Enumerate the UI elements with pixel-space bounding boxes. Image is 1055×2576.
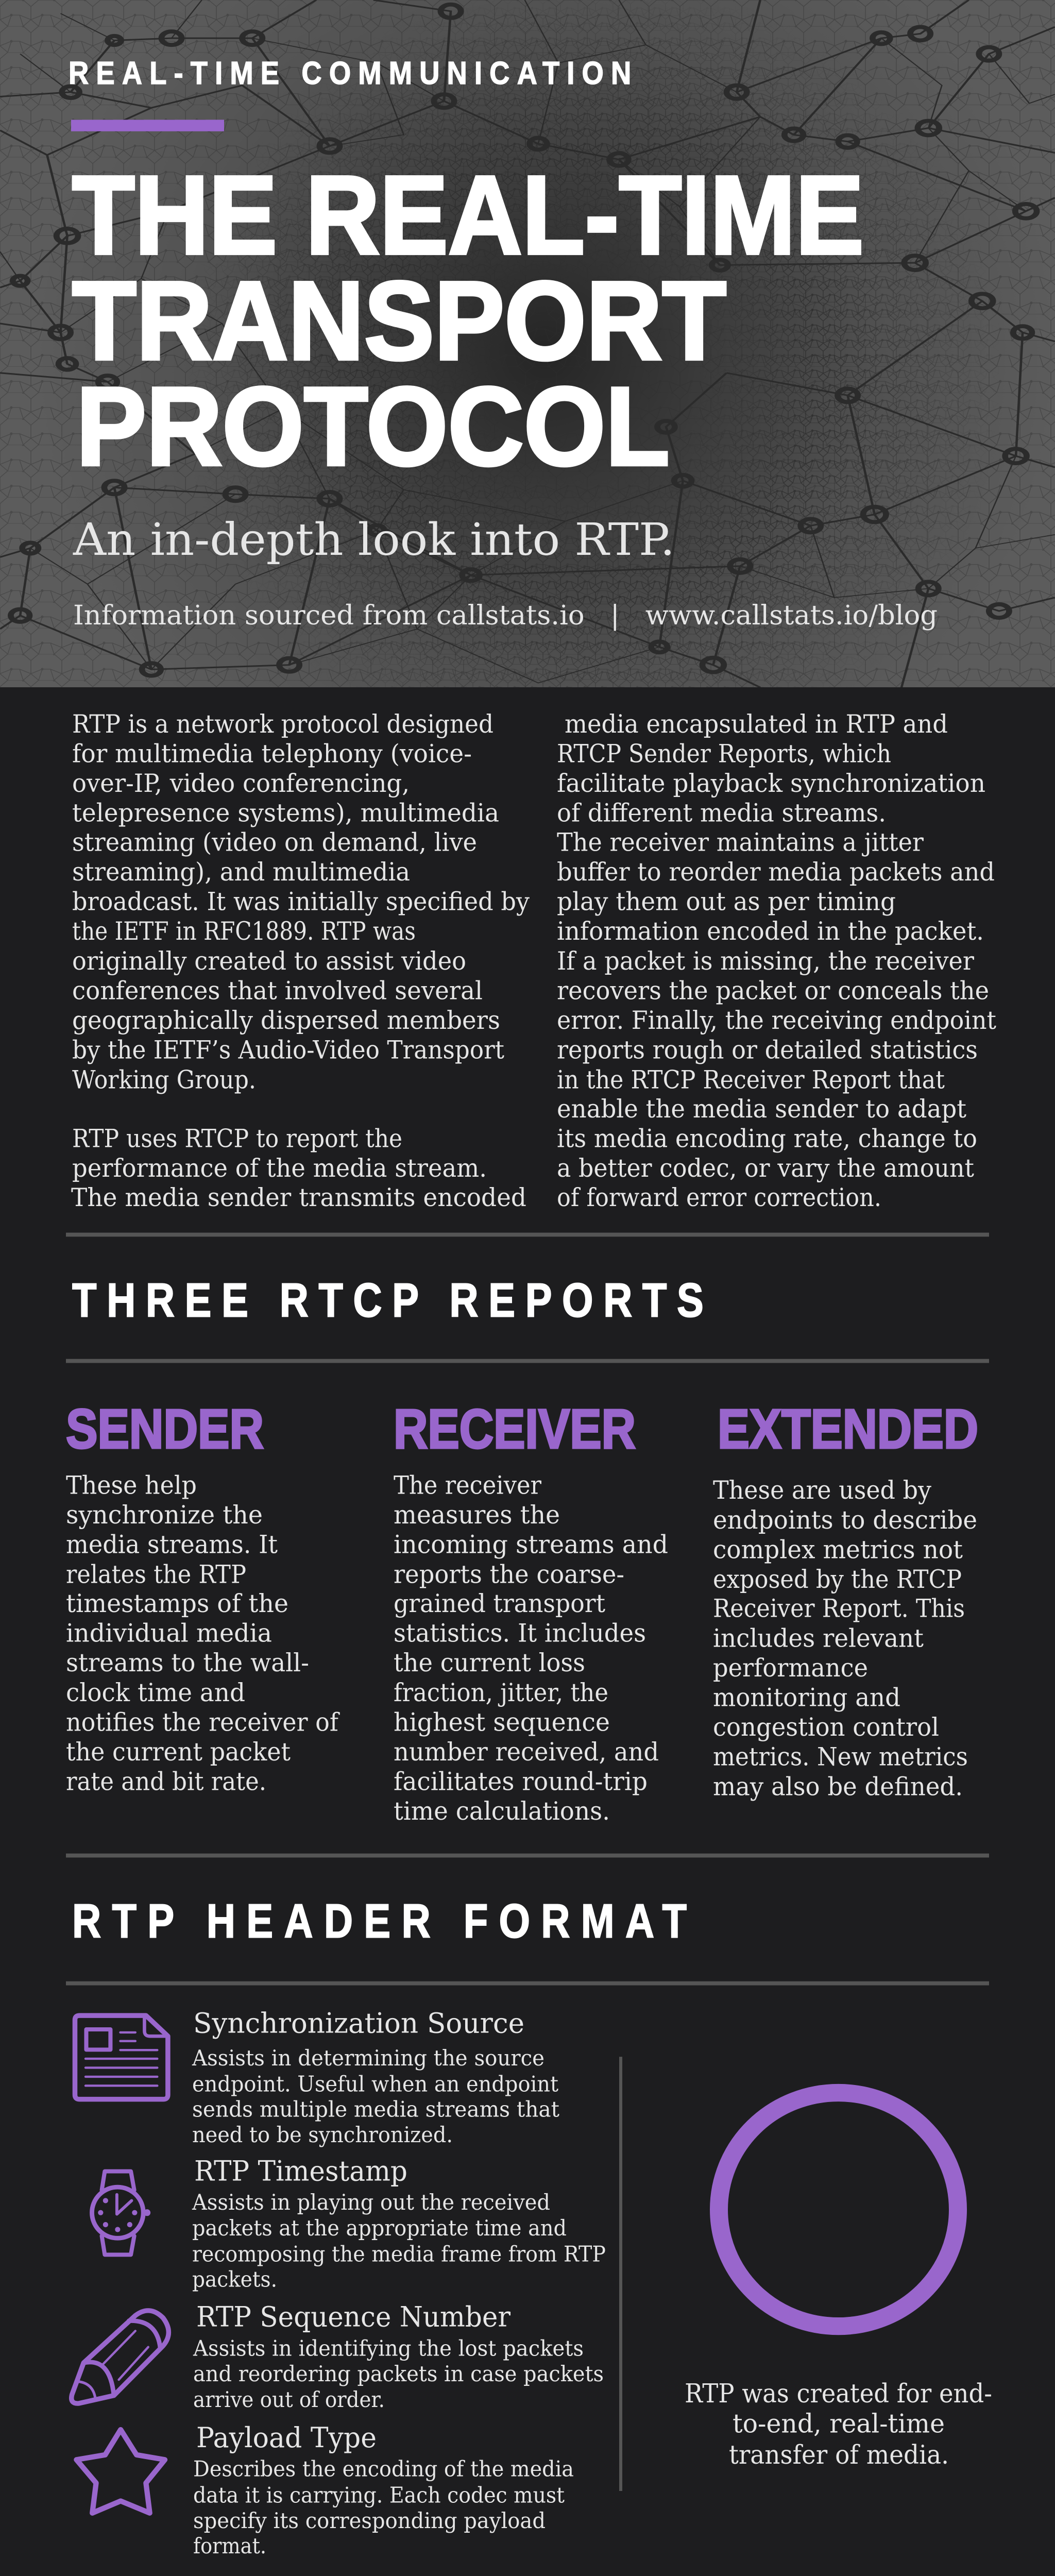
- sender body text: notifies the receiver of: [66, 1707, 340, 1737]
- description: RTP sequence number: and reordering packets in case packets: [193, 2362, 604, 2387]
- intro text: left column: broadcast. It was initially specified by: [72, 887, 530, 916]
- main title: TRANSPORT: [72, 259, 726, 383]
- intro text: left column: the IETF in RFC1889. RTP was: [72, 917, 416, 946]
- callout text: to-end, real-time: [733, 2409, 945, 2439]
- intro text: left column: streaming (video on demand, live: [72, 827, 477, 857]
- description: RTP timestamp: [192, 2191, 606, 2292]
- eyebrow label: REAL-TIME COMMUNICATION: [69, 56, 631, 91]
- description: synchronization source: [192, 2046, 559, 2148]
- intro text: right column: a better codec, or vary the amount: [557, 1154, 974, 1183]
- intro text: right column: error. Finally, the receiving endpoint: [557, 1006, 996, 1035]
- intro text: right column: play them out as per timing: [557, 887, 896, 916]
- title: payload type: Payload Type: [196, 2422, 377, 2454]
- icon: newspaper: [75, 2015, 168, 2099]
- panel: receiver report: [394, 1399, 668, 1826]
- sender body text: media streams. It: [66, 1530, 278, 1560]
- description: RTP timestamp: packets.: [192, 2267, 277, 2292]
- section heading: RTP header format: RTP HEADER FORMAT: [72, 1894, 687, 1948]
- extended body text: monitoring and: [713, 1683, 900, 1712]
- title: synchronization source: Synchronization Source: [193, 2007, 524, 2040]
- description: RTP timestamp: Assists in playing out the received: [192, 2191, 550, 2215]
- intro text: left column: by the IETF’s Audio-Video Transport: [72, 1035, 504, 1065]
- intro text: left column: telepresence systems), multimedia: [72, 798, 499, 828]
- receiver body text: time calculations.: [394, 1797, 610, 1826]
- receiver body text: reports the coarse-: [394, 1560, 624, 1589]
- header panel: [0, 0, 1055, 687]
- intro text: left column: [71, 709, 530, 1212]
- sender body text: individual media: [66, 1618, 272, 1648]
- panel: sender report: [66, 1399, 340, 1796]
- main title: [72, 175, 861, 468]
- main title: PROTOCOL: [76, 364, 670, 489]
- callout text: [685, 2379, 992, 2470]
- intro text: left column: over-IP, video conferencing,: [72, 769, 410, 798]
- description: RTP sequence number: [193, 2336, 604, 2413]
- sender body text: These help: [66, 1470, 197, 1500]
- receiver body text: incoming streams and: [394, 1530, 668, 1560]
- receiver body text: The receiver: [394, 1470, 541, 1500]
- description: synchronization source: endpoint. Useful when an endpoint: [192, 2072, 558, 2097]
- intro text: right column: its media encoding rate, change to: [557, 1124, 977, 1153]
- sender body text: the current packet: [66, 1737, 291, 1767]
- sender body text: timestamps of the: [66, 1588, 288, 1618]
- intro text: right column: in the RTCP Receiver Report that: [557, 1065, 945, 1094]
- icon: wristwatch: [92, 2172, 150, 2255]
- sender body text: synchronize the: [66, 1500, 263, 1530]
- description: payload type: Describes the encoding of the media: [193, 2457, 574, 2482]
- item: RTP sequence number: [193, 2301, 604, 2413]
- sender body text: rate and bit rate.: [66, 1767, 266, 1796]
- description: RTP timestamp: packets at the appropriate time and: [192, 2216, 567, 2241]
- intro text: right column: of different media streams.: [557, 798, 886, 828]
- receiver body text: statistics. It includes: [394, 1618, 646, 1648]
- sender body text: [66, 1470, 340, 1796]
- receiver body text: highest sequence: [394, 1707, 610, 1737]
- header network background image: [0, 0, 1055, 687]
- description: synchronization source: need to be synchronized.: [192, 2123, 453, 2148]
- intro text: right column: RTCP Sender Reports, which: [557, 739, 891, 768]
- intro text: right column: of forward error correction.: [557, 1182, 881, 1212]
- callout text: RTP was created for end-: [685, 2379, 992, 2409]
- intro text: right column: If a packet is missing, the receiver: [557, 946, 974, 976]
- extended body text: congestion control: [713, 1713, 939, 1742]
- sender body text: relates the RTP: [66, 1560, 246, 1589]
- intro text: right column: [557, 709, 996, 1212]
- extended body text: Receiver Report. This: [713, 1594, 965, 1623]
- callout text: transfer of media.: [729, 2440, 949, 2470]
- description: RTP timestamp: recomposing the media frame from RTP: [192, 2242, 606, 2267]
- heading: sender: SENDER: [66, 1399, 264, 1460]
- receiver body text: measures the: [394, 1500, 560, 1530]
- intro text: left column: geographically dispersed members: [72, 1006, 500, 1035]
- intro text: left column: The media sender transmits encoded: [71, 1182, 526, 1212]
- extended body text: may also be defined.: [713, 1772, 963, 1801]
- heading: receiver: RECEIVER: [394, 1399, 636, 1460]
- intro text: right column: media encapsulated in RTP and: [565, 709, 948, 739]
- intro text: right column: recovers the packet or conceals the: [557, 976, 989, 1005]
- subtitle: An in-depth look into RTP.: [73, 514, 675, 566]
- receiver body text: number received, and: [394, 1737, 659, 1767]
- intro text: left column: originally created to assist video: [72, 946, 466, 976]
- item: RTP timestamp: [192, 2155, 606, 2292]
- description: payload type: specify its corresponding payload: [193, 2509, 546, 2534]
- description: payload type: format.: [193, 2534, 266, 2559]
- intro text: left column: performance of the media stream.: [72, 1154, 487, 1183]
- intro text: right column: enable the media sender to adapt: [557, 1094, 966, 1124]
- title: RTP sequence number: RTP Sequence Number: [196, 2301, 511, 2333]
- description: payload type: data it is carrying. Each codec must: [193, 2483, 565, 2508]
- description: RTP sequence number: Assists in identifying the lost packets: [193, 2336, 584, 2361]
- intro text: left column: Working Group.: [72, 1065, 256, 1094]
- sender body text: clock time and: [66, 1677, 245, 1707]
- description: payload type: [193, 2457, 574, 2559]
- intro text: right column: reports rough or detailed statistics: [557, 1035, 978, 1065]
- item: payload type: [193, 2422, 574, 2559]
- receiver body text: [394, 1470, 668, 1826]
- description: RTP sequence number: arrive out of order.: [193, 2387, 385, 2413]
- ring graphic: [719, 2093, 958, 2326]
- extended body text: [713, 1476, 977, 1801]
- intro text: left column: RTP uses RTCP to report the: [72, 1124, 402, 1153]
- accent bar: [71, 120, 224, 131]
- extended body text: metrics. New metrics: [713, 1742, 968, 1772]
- title: RTP timestamp: RTP Timestamp: [194, 2155, 407, 2188]
- intro text: left column: conferences that involved several: [72, 976, 483, 1005]
- sender body text: streams to the wall-: [66, 1648, 309, 1677]
- intro text: right column: The receiver maintains a jitter: [557, 827, 924, 857]
- heading: extended: EXTENDED: [718, 1399, 978, 1460]
- intro text: left column: streaming), and multimedia: [72, 857, 410, 887]
- receiver body text: the current loss: [394, 1648, 585, 1677]
- panel: extended report: [713, 1399, 978, 1801]
- intro text: right column: buffer to reorder media packets and: [557, 857, 995, 887]
- extended body text: These are used by: [713, 1476, 931, 1505]
- receiver body text: facilitates round-trip: [394, 1767, 648, 1796]
- extended body text: performance: [713, 1653, 868, 1683]
- icon: star: [76, 2430, 165, 2513]
- intro text: right column: information encoded in the packet.: [557, 917, 984, 946]
- section heading: three RTCP reports: THREE RTCP REPORTS: [72, 1274, 704, 1327]
- extended body text: includes relevant: [713, 1623, 924, 1653]
- extended body text: endpoints to describe: [713, 1505, 977, 1535]
- description: synchronization source: Assists in determining the source: [192, 2046, 544, 2071]
- intro text: right column: facilitate playback synchronization: [557, 769, 985, 798]
- main title: THE REAL-TIME: [72, 153, 864, 278]
- intro text: left column: RTP is a network protocol designed: [72, 709, 494, 739]
- receiver body text: fraction, jitter, the: [394, 1677, 608, 1707]
- source line: Information sourced from callstats.io | www.callstats.io/blog: [73, 599, 938, 631]
- intro text: left column: for multimedia telephony (voice-: [72, 739, 472, 768]
- icon: pencil: [72, 2311, 168, 2403]
- extended body text: exposed by the RTCP: [713, 1565, 962, 1594]
- description: synchronization source: sends multiple media streams that: [192, 2097, 559, 2122]
- extended body text: complex metrics not: [713, 1535, 963, 1564]
- item: synchronization source: [192, 2007, 559, 2148]
- receiver body text: grained transport: [394, 1588, 605, 1618]
